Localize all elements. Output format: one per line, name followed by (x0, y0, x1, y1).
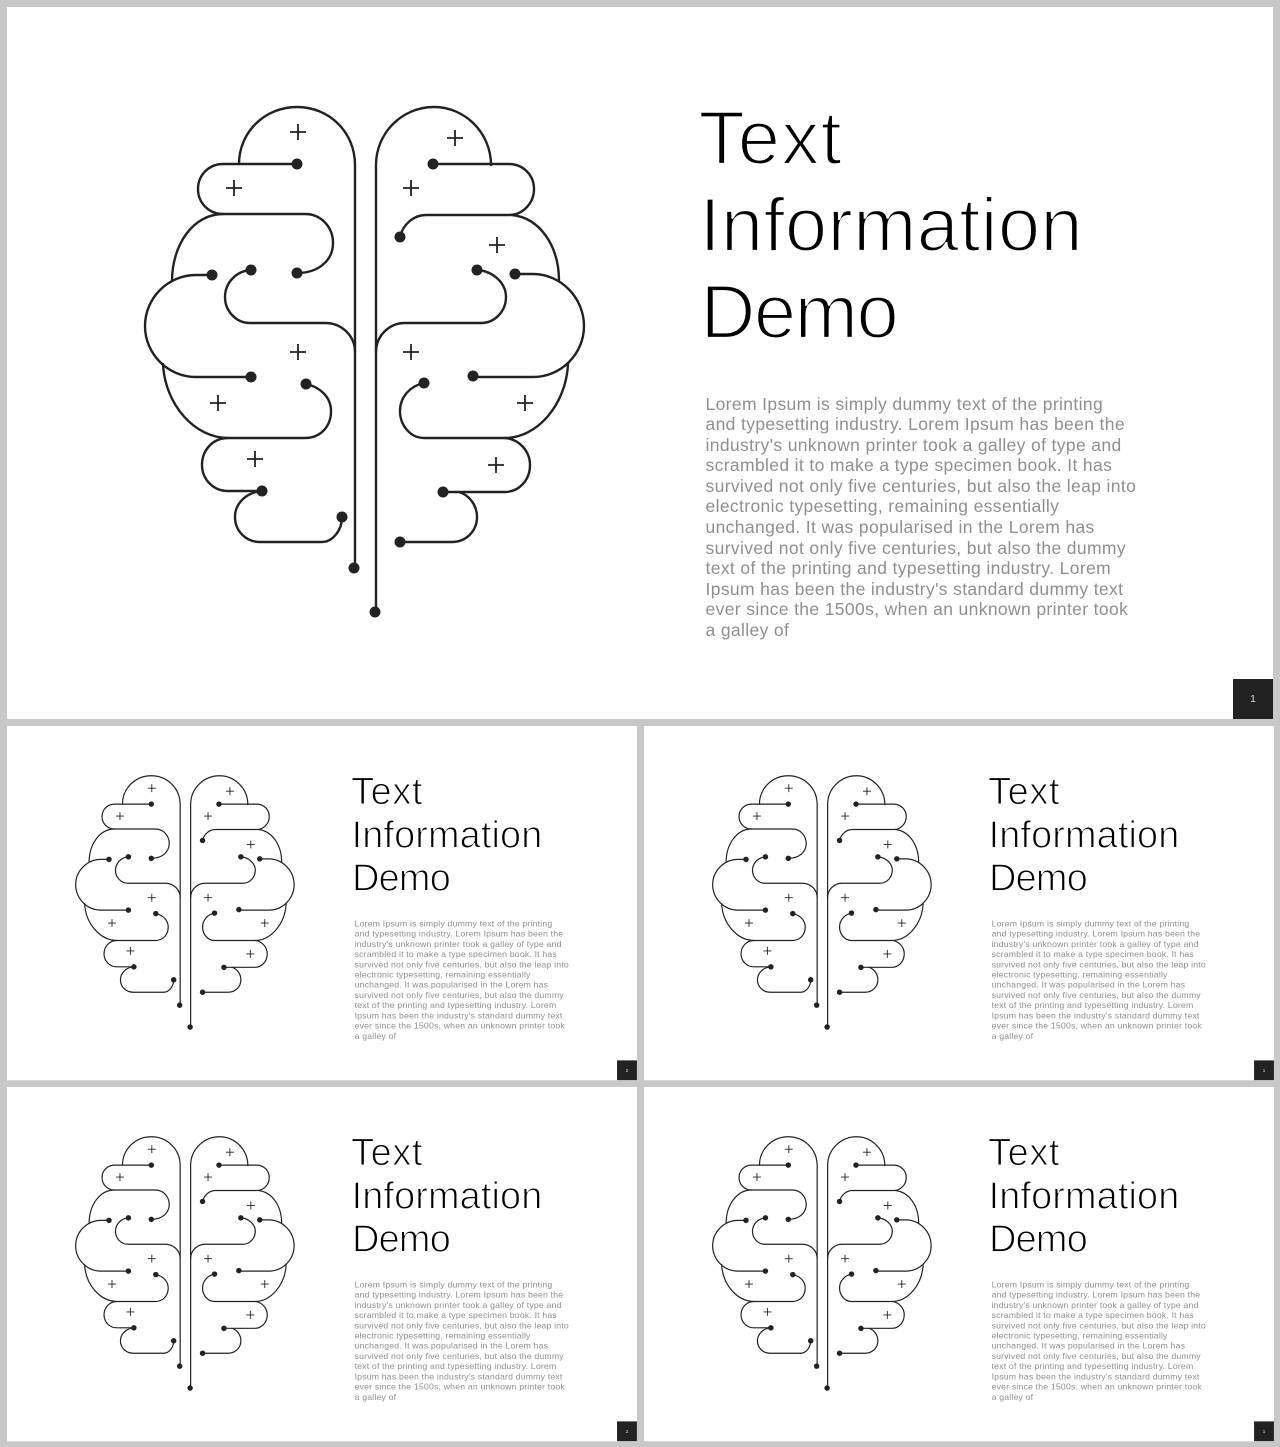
panel: slide thumbnail top left (7, 726, 637, 1080)
brain circuit illustration (75, 775, 295, 1030)
body text: and typesetting industry. Lorem Ipsum has been the (992, 1290, 1200, 1300)
title: Information (989, 813, 1179, 856)
body text: a galley of (992, 1031, 1033, 1041)
body text: survived not only five centuries, but also the leap into (992, 1320, 1206, 1330)
body text: text of the printing and typesetting industry. Lorem (992, 1000, 1193, 1010)
page number badge: 1 (1263, 1429, 1265, 1434)
body text: unchanged. It was popularised in the Lorem has (355, 980, 548, 990)
body text: a galley of (355, 1392, 396, 1402)
title (351, 1131, 542, 1260)
body text: and typesetting industry. Lorem Ipsum has been the (355, 1290, 563, 1300)
body text: ever since the 1500s, when an unknown printer took (992, 1382, 1202, 1392)
body text: Lorem Ipsum is simply dummy text of the printing (992, 1279, 1189, 1289)
body text: survived not only five centuries, but also the dummy (992, 1351, 1201, 1361)
body text: ever since the 1500s, when an unknown printer took (992, 1021, 1202, 1031)
title (698, 96, 1083, 355)
body text (706, 394, 1136, 640)
body text: survived not only five centuries, but also the leap into (355, 1320, 569, 1330)
body text: industry's unknown printer took a galley of type and (992, 939, 1199, 949)
body text: Lorem Ipsum is simply dummy text of the printing (355, 1279, 552, 1289)
body text: text of the printing and typesetting industry. Lorem (706, 558, 1111, 578)
body text: survived not only five centuries, but also the dummy (706, 538, 1126, 558)
page number badge: 1 (1263, 1068, 1265, 1073)
body text: electronic typesetting, remaining essentially (355, 970, 531, 979)
body text (992, 918, 1206, 1041)
panel: slide thumbnail bottom right (644, 1087, 1274, 1441)
body text: scrambled it to make a type specimen book. It has (355, 949, 557, 959)
body text: survived not only five centuries, but also the dummy (355, 1351, 564, 1361)
title: Text (988, 770, 1060, 812)
body text: unchanged. It was popularised in the Lorem has (706, 517, 1095, 537)
body text: survived not only five centuries, but also the leap into (706, 476, 1136, 496)
body text: unchanged. It was popularised in the Lorem has (992, 980, 1185, 990)
panel: slide thumbnail bottom left (7, 1087, 637, 1441)
title: Demo (352, 1218, 450, 1260)
title: Text (698, 96, 843, 181)
title: Information (352, 1174, 542, 1217)
body text: Lorem Ipsum is simply dummy text of the printing (992, 918, 1189, 928)
title: Information (700, 183, 1083, 268)
body text: Ipsum has been the industry's standard dummy text (355, 1371, 563, 1381)
panel: slide thumbnail top right (644, 726, 1274, 1080)
body text: Lorem Ipsum is simply dummy text of the printing (355, 918, 552, 928)
body text: Lorem Ipsum is simply dummy text of the printing (706, 394, 1103, 414)
body text: a galley of (355, 1031, 396, 1041)
body text: scrambled it to make a type specimen book. It has (706, 455, 1112, 475)
body text: electronic typesetting, remaining essentially (706, 496, 1059, 516)
body text: and typesetting industry. Lorem Ipsum has been the (992, 929, 1200, 939)
body text: a galley of (992, 1392, 1033, 1402)
body text: unchanged. It was popularised in the Lorem has (355, 1341, 548, 1351)
body text: Ipsum has been the industry's standard dummy text (706, 579, 1123, 599)
body text: scrambled it to make a type specimen book. It has (992, 1310, 1194, 1320)
body text (354, 1279, 569, 1402)
page number badge (1254, 1421, 1274, 1441)
body text: industry's unknown printer took a galley of type and (992, 1300, 1199, 1310)
body text: industry's unknown printer took a galley of type and (355, 939, 562, 949)
body text: text of the printing and typesetting industry. Lorem (992, 1361, 1193, 1371)
body text: industry's unknown printer took a galley of type and (706, 435, 1122, 455)
title: Demo (700, 270, 897, 355)
page number badge (1233, 679, 1273, 719)
title: Information (989, 1174, 1179, 1217)
title: Information (352, 813, 542, 856)
brain circuit illustration (712, 1136, 932, 1391)
page number badge: 2 (626, 1429, 628, 1434)
panel: main slide (7, 7, 1273, 719)
body text: Ipsum has been the industry's standard dummy text (992, 1010, 1200, 1020)
body text: unchanged. It was popularised in the Lorem has (992, 1341, 1185, 1351)
body text: survived not only five centuries, but also the leap into (992, 959, 1206, 969)
title: Demo (989, 1218, 1087, 1260)
body text: ever since the 1500s, when an unknown printer took (355, 1382, 565, 1392)
body text: a galley of (706, 620, 789, 640)
body text: scrambled it to make a type specimen book. It has (992, 949, 1194, 959)
body text: and typesetting industry. Lorem Ipsum has been the (706, 414, 1125, 434)
title (988, 770, 1179, 899)
body text: survived not only five centuries, but also the leap into (355, 959, 569, 969)
page number badge (1254, 1060, 1274, 1080)
title: Text (351, 1131, 423, 1173)
title: Demo (352, 857, 450, 899)
title: Text (351, 770, 423, 812)
page number badge: 2 (626, 1068, 628, 1073)
page number badge (617, 1060, 637, 1080)
title: Text (988, 1131, 1060, 1173)
body text: survived not only five centuries, but also the dummy (992, 990, 1201, 1000)
body text: electronic typesetting, remaining essentially (992, 1331, 1168, 1340)
page number badge: 1 (1250, 694, 1256, 705)
body text: industry's unknown printer took a galley of type and (355, 1300, 562, 1310)
title: Demo (989, 857, 1087, 899)
body text: electronic typesetting, remaining essentially (992, 970, 1168, 979)
body text: text of the printing and typesetting industry. Lorem (355, 1361, 556, 1371)
title (988, 1131, 1179, 1260)
body text: ever since the 1500s, when an unknown printer took (706, 599, 1128, 619)
body text: Ipsum has been the industry's standard dummy text (355, 1010, 563, 1020)
body text (992, 1279, 1206, 1402)
body text (354, 918, 569, 1041)
page number badge (617, 1421, 637, 1441)
brain circuit illustration (144, 106, 586, 618)
body text: ever since the 1500s, when an unknown printer took (355, 1021, 565, 1031)
body text: Ipsum has been the industry's standard dummy text (992, 1371, 1200, 1381)
body text: survived not only five centuries, but also the dummy (355, 990, 564, 1000)
title (351, 770, 542, 899)
body text: text of the printing and typesetting industry. Lorem (355, 1000, 556, 1010)
body text: and typesetting industry. Lorem Ipsum has been the (355, 929, 563, 939)
body text: scrambled it to make a type specimen book. It has (355, 1310, 557, 1320)
brain circuit illustration (712, 775, 932, 1030)
brain circuit illustration (75, 1136, 295, 1391)
body text: electronic typesetting, remaining essentially (355, 1331, 531, 1340)
